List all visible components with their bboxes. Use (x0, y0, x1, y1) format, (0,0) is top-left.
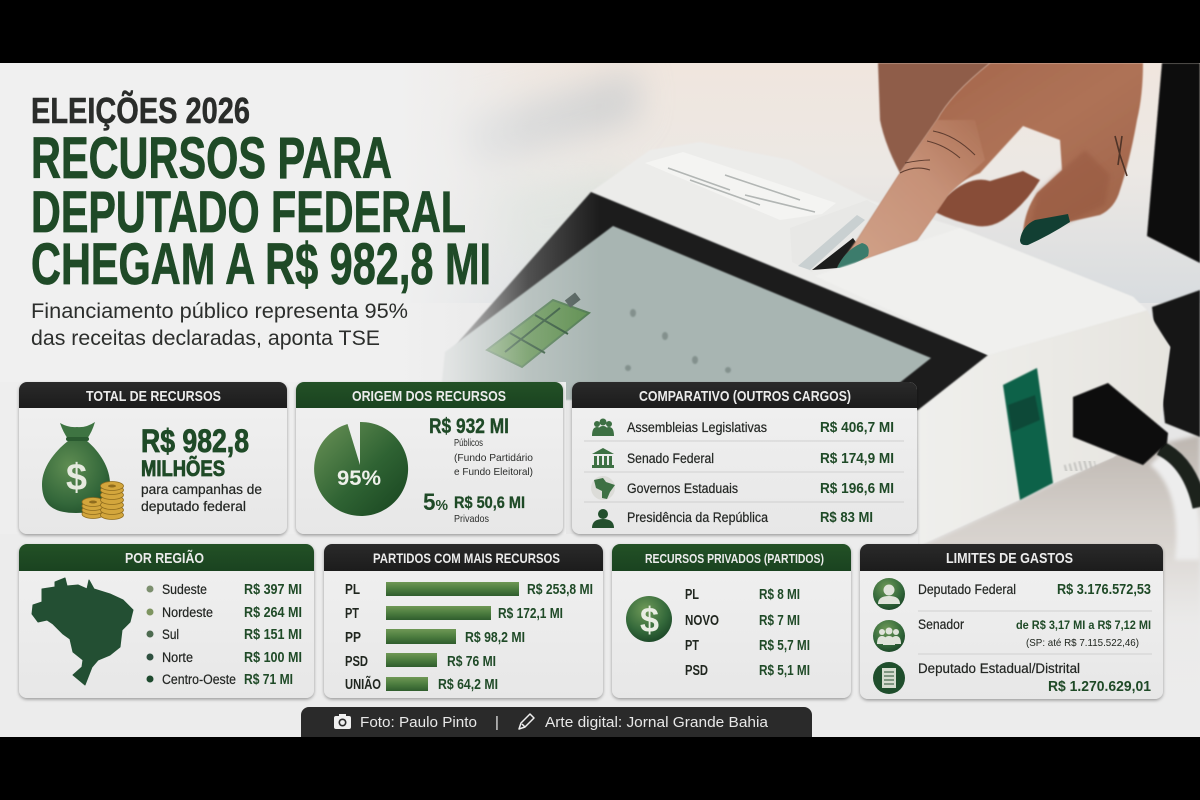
heading: PARTIDOS COM MAIS RECURSOS (373, 550, 560, 566)
legend: Sul: R$ 151 MI (244, 626, 302, 643)
row: deputado estadual: R$ 1.270.629,01 (1048, 678, 1151, 695)
green stripe (1003, 368, 1053, 500)
legend: Centro-Oeste (146, 671, 293, 688)
bezel (447, 192, 988, 410)
row: governos: R$ 196,6 MI (820, 480, 894, 497)
private share: 5% (423, 489, 448, 516)
row: senador (873, 617, 1151, 652)
power plug and cable (1073, 383, 1200, 507)
row: PT: R$ 5,7 MI (759, 637, 810, 654)
legend: Norte (146, 649, 302, 666)
subtitle: das receitas declaradas, aponta TSE (31, 327, 380, 350)
icon: money bag with coins (42, 422, 124, 520)
row: senador: (SP: até R$ 7.115.522,46) (1026, 637, 1139, 649)
light fade over left of photo (0, 63, 589, 398)
public caption: e Fundo Eleitoral) (454, 466, 533, 478)
legend: Sudeste (146, 581, 302, 598)
fingernails (1020, 214, 1070, 245)
big number: R$ 982,8 (141, 423, 249, 459)
bar: PT: PT (345, 605, 359, 622)
row: presidencia (592, 509, 873, 528)
headline line 1: RECURSOS PARA (31, 126, 392, 191)
bar: UNIÃO: UNIÃO (345, 675, 381, 693)
row: assembleias: R$ 406,7 MI (820, 419, 894, 436)
dark background objects (1147, 63, 1200, 263)
row: deputado federal: R$ 3.176.572,53 (1057, 581, 1151, 598)
panel: limites de gastos (860, 544, 1163, 699)
legend: Centro-Oeste: R$ 71 MI (244, 671, 293, 688)
legend: Nordeste (146, 604, 302, 621)
icon: money bag with coins: $ (66, 457, 87, 499)
row: PL: R$ 8 MI (759, 586, 800, 603)
top black band (0, 0, 1200, 63)
public value: R$ 932 MI (429, 415, 509, 438)
bottom black band (0, 737, 1200, 800)
bar: PT: R$ 172,1 MI (498, 605, 563, 622)
bar: UNIÃO (345, 675, 498, 693)
panel: total de recursos (19, 382, 287, 534)
panel: origem dos recursos (296, 382, 563, 534)
caption: para campanhas de (141, 482, 262, 497)
row: senador: de R$ 3,17 MI a R$ 7,12 MI (1016, 618, 1151, 632)
public caption: Públicos (454, 437, 483, 449)
public caption (454, 437, 533, 478)
panel: recursos privados (612, 544, 851, 698)
screen (440, 226, 931, 400)
row: NOVO: NOVO (685, 612, 719, 629)
legend: Nordeste: R$ 264 MI (244, 604, 302, 621)
row: deputado federal: Deputado Federal (918, 582, 1016, 597)
heading: RECURSOS PRIVADOS (PARTIDOS) (645, 551, 824, 566)
fingerprint reader recess (790, 200, 900, 272)
row: senado: Senado Federal (627, 451, 714, 466)
icon: dollar coin: $ (640, 601, 659, 640)
row: senador: Senador (918, 617, 964, 632)
panel: por regiao (19, 544, 314, 698)
legend: Norte: Norte (162, 650, 193, 665)
row: presidencia: R$ 83 MI (820, 509, 873, 526)
row: assembleias: Assembleias Legislativas (627, 420, 767, 435)
pie chart 95%: 95% (337, 467, 381, 490)
hand (837, 63, 1143, 268)
blurred background equipment (478, 69, 646, 199)
icon: dollar coin (626, 596, 672, 642)
bar: PL: R$ 253,8 MI (527, 581, 593, 598)
heading: ORIGEM DOS RECURSOS (352, 388, 506, 405)
art credit: Arte digital: Jornal Grande Bahia (545, 714, 769, 731)
map of Brazil (32, 578, 133, 685)
raised front block of machine (836, 250, 1146, 356)
row: deputado federal (873, 578, 1151, 610)
row: deputado estadual (873, 661, 1151, 695)
panel: partidos com mais recursos (324, 544, 603, 698)
private caption: Privados (454, 513, 489, 525)
private value: R$ 50,6 MI (454, 493, 525, 512)
panel: comparativo outros cargos (572, 382, 917, 534)
heading: TOTAL DE RECURSOS (86, 388, 221, 405)
machine body (440, 142, 1170, 545)
bar: PSD: R$ 76 MI (447, 653, 496, 670)
bar: UNIÃO: R$ 64,2 MI (438, 676, 498, 693)
legend: Centro-Oeste: Centro-Oeste (162, 672, 236, 687)
bar: PP (345, 629, 525, 646)
subtitle: Financiamento público representa 95% (31, 300, 408, 323)
bar: PP: R$ 98,2 MI (465, 629, 525, 646)
caption (141, 482, 262, 514)
row: governos: Governos Estaduais (627, 481, 738, 496)
row: PT (685, 637, 810, 654)
row: PSD (685, 662, 810, 679)
heading: COMPARATIVO (OUTROS CARGOS) (639, 388, 851, 405)
legend: Sul: Sul (162, 627, 179, 642)
row: senado: R$ 174,9 MI (820, 450, 894, 467)
icon: pencil (519, 714, 534, 729)
legend: Sudeste: R$ 397 MI (244, 581, 302, 598)
legend: Sudeste: Sudeste (162, 582, 207, 597)
paper label (645, 152, 836, 220)
screen digits blurred (625, 309, 731, 373)
row: PT: PT (685, 637, 699, 654)
row: PSD: R$ 5,1 MI (759, 662, 810, 679)
heading: LIMITES DE GASTOS (946, 550, 1073, 567)
row: PL (685, 586, 800, 603)
row: presidencia: Presidência da República (627, 510, 768, 525)
bar: PSD (345, 653, 496, 670)
bar: PT (345, 605, 563, 622)
bar: PL: PL (345, 581, 360, 598)
caption: deputado federal (141, 499, 246, 514)
subtitle (31, 300, 408, 350)
row: governos (591, 476, 894, 500)
bar: PP: PP (345, 629, 361, 646)
public caption: (Fundo Partidário (454, 452, 533, 464)
row: PSD: PSD (685, 662, 708, 679)
headline line 2: DEPUTADO FEDERAL (31, 180, 466, 245)
bar: PL (345, 581, 593, 598)
pie chart 95% (314, 422, 408, 516)
blurred table (926, 435, 1200, 591)
title block (31, 89, 491, 297)
unit: MILHÕES (141, 456, 225, 481)
legend: Sul (146, 626, 302, 643)
battery symbol on screen (487, 293, 589, 367)
separator: | (495, 714, 499, 731)
row: assembleias (592, 418, 894, 436)
photo credit: Foto: Paulo Pinto (360, 714, 477, 731)
row: PL: PL (685, 586, 699, 603)
bar: PSD: PSD (345, 653, 368, 670)
legend: Nordeste: Nordeste (162, 605, 213, 620)
bar chart (345, 581, 593, 693)
row: NOVO (685, 612, 800, 629)
icon: camera (334, 714, 351, 729)
heading: POR REGIÃO (125, 549, 204, 567)
legend: Norte: R$ 100 MI (244, 649, 302, 666)
row: NOVO: R$ 7 MI (759, 612, 800, 629)
row: deputado estadual: Deputado Estadual/Distrital (918, 661, 1080, 676)
row: senado (592, 448, 894, 468)
credits bar (301, 707, 812, 737)
headline line 3: CHEGAM A R$ 982,8 MI (31, 232, 491, 297)
kicker: Eleições 2026: ELEIÇÕES 2026 (31, 89, 250, 131)
